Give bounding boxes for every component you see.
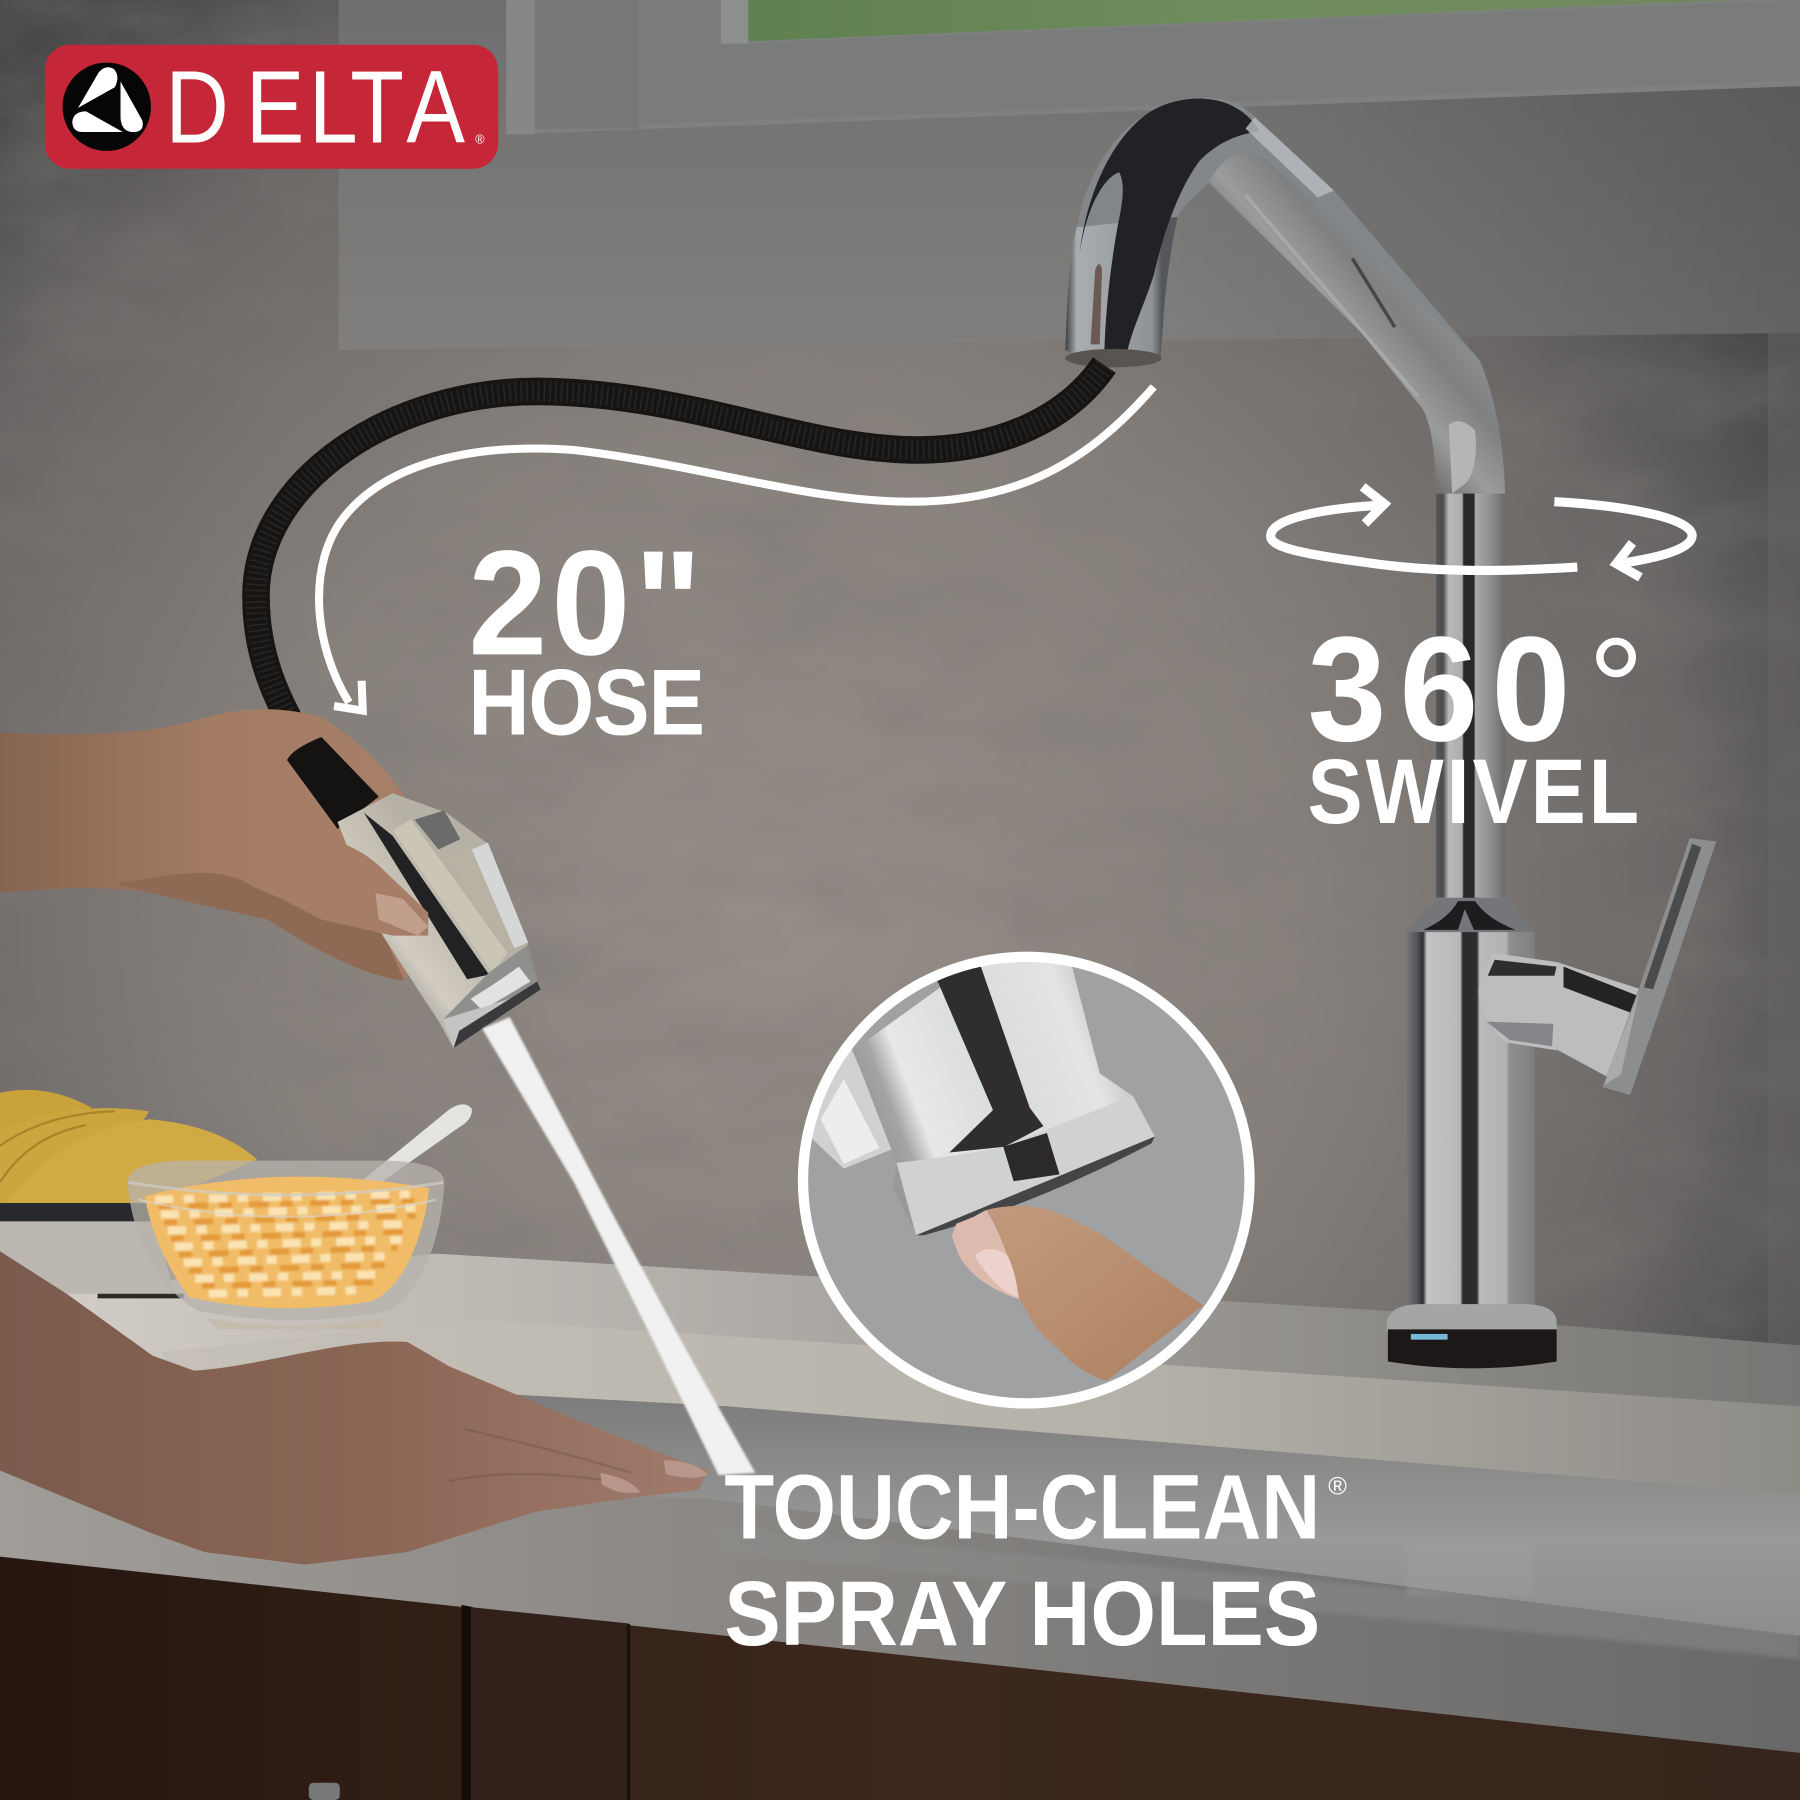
icon: Delta triangle mark [63, 63, 151, 151]
Delta logo [45, 45, 498, 169]
chrome rim [443, 990, 541, 1048]
window glass [748, 0, 1733, 41]
window trim and sill [339, 0, 1800, 350]
wooden cabinets [0, 1557, 1800, 1800]
baking pan [0, 1203, 184, 1298]
text: 360 degree swivel [1308, 605, 1645, 843]
arrow: swivel rotation [1271, 487, 1692, 577]
sprayer head [287, 737, 541, 1048]
text: 360 degree swivel: ° [1588, 609, 1645, 768]
handle cylinder [1479, 953, 1557, 1050]
faucet base [1387, 1304, 1557, 1332]
chrome long dark stripe [364, 813, 489, 979]
text: touch-clean spray holes: SPRAY HOLES [724, 1563, 1320, 1665]
faucet body and handle [1387, 838, 1716, 1368]
Delta logo: DELTA [165, 50, 465, 165]
text: 360 degree swivel: SWIVEL [1308, 740, 1639, 843]
faucet spout [1065, 98, 1505, 907]
chrome upper button [447, 843, 528, 952]
black hose collar [287, 737, 379, 829]
text: 360 degree swivel: 360 [1308, 605, 1570, 772]
icon: spoon [363, 1104, 472, 1182]
handle hub [1552, 962, 1642, 1077]
text: touch-clean spray holes: TOUCH-CLEAN [724, 1456, 1320, 1558]
chrome small tab [414, 810, 460, 849]
upper hand holding sprayer [0, 709, 432, 980]
icon: glass bowl with cheese [127, 1161, 444, 1329]
braided hose [256, 365, 1104, 752]
fingernails [664, 1460, 708, 1478]
food: tacos, pan and bowl of cheese [0, 1090, 472, 1329]
sprayer button [812, 1050, 892, 1168]
icon: taco shells [0, 1090, 257, 1203]
water stream [482, 1017, 755, 1475]
finger [986, 1206, 1203, 1381]
arrow: hose length curve [319, 387, 1154, 711]
text: 20 inch hose [468, 519, 705, 755]
text: touch-clean spray holes: ® [1328, 1473, 1347, 1501]
vertical riser tube [1436, 494, 1505, 901]
Delta logo: ® [475, 132, 485, 146]
text: 20 inch hose: 20" [468, 519, 702, 686]
chrome neck [443, 945, 540, 1019]
text: touch-clean spray holes [724, 1456, 1347, 1665]
nozzle rim [897, 1096, 1155, 1235]
touch indicator light [1411, 1334, 1448, 1340]
text: 20 inch hose: HOSE [468, 650, 705, 755]
thumb over sprayer [257, 837, 428, 936]
countertop and sink [0, 1254, 1800, 1756]
handle lever [1603, 838, 1716, 1095]
sprayer nozzle chrome [853, 959, 1155, 1235]
spout nozzle [1065, 217, 1178, 364]
inset circle: touch-clean spray holes [802, 956, 1250, 1404]
dark reflection [937, 959, 1043, 1153]
chrome main button [393, 820, 507, 972]
fingernail [975, 1249, 1018, 1297]
spout dark curve reflection [1079, 99, 1259, 352]
lower hand resting on counter [0, 1251, 708, 1565]
